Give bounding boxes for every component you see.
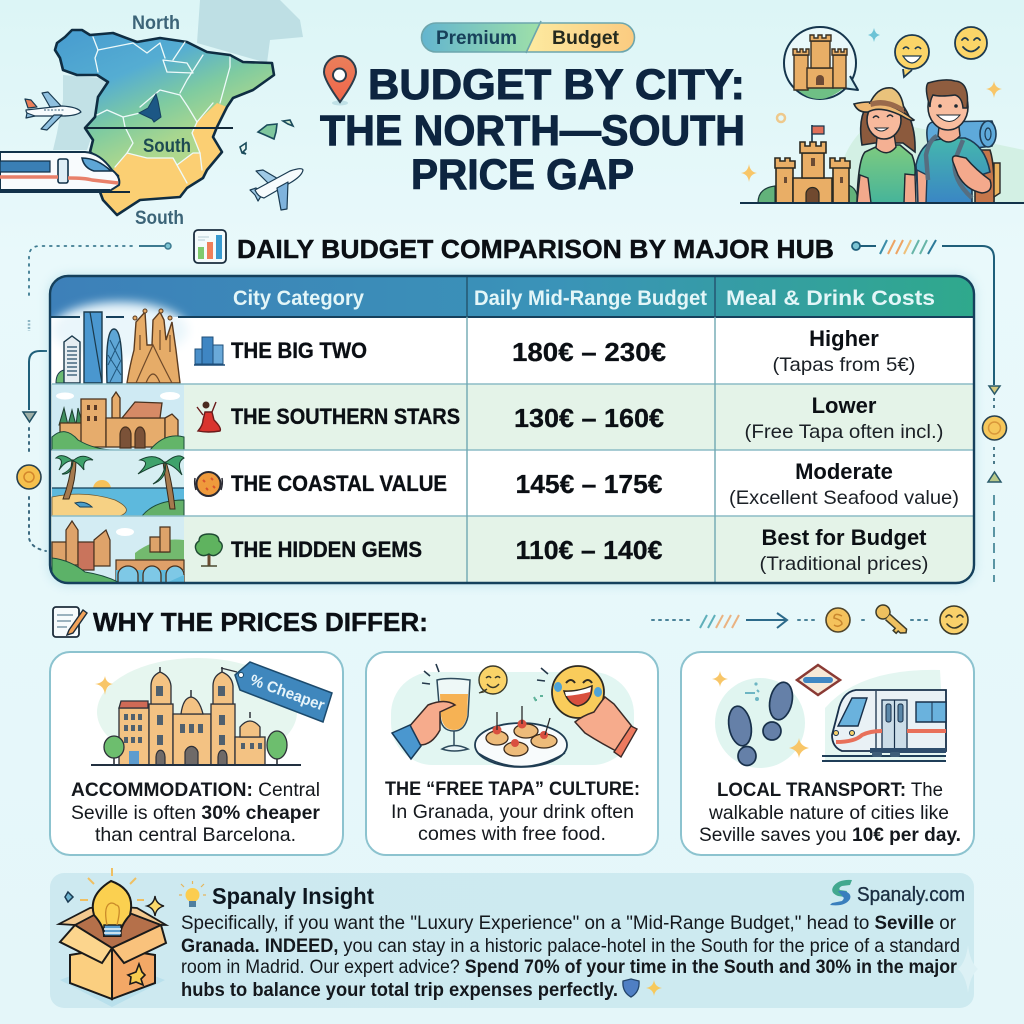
table header labels: Meal & Drink Costs xyxy=(726,286,935,310)
table image: southern palace xyxy=(52,384,184,450)
row: the southern stars xyxy=(231,393,944,443)
connector: top right line to table side xyxy=(852,240,1006,582)
illustration: travellers and castle xyxy=(740,27,1024,203)
icon: paella pan xyxy=(195,472,222,496)
decorative journey strip: arrow, coin, key, smile xyxy=(652,602,968,638)
connector: left side arrow and coin xyxy=(17,351,47,551)
map of Spain with north-south gradient: North xyxy=(132,13,180,34)
row: the big two xyxy=(231,326,916,376)
card text: comes with free food. xyxy=(418,823,606,845)
table image: big cities skyline xyxy=(52,302,188,383)
insight body text: Granada. INDEED, you can stay in a historic palace-hotel in the South for the price of a standard xyxy=(181,936,960,957)
icon: location pin xyxy=(324,56,356,106)
row: the big two: THE BIG TWO xyxy=(231,338,367,363)
card text: In Granada, your drink often xyxy=(391,801,634,823)
icon: tree xyxy=(195,534,222,566)
card text xyxy=(385,778,640,845)
row: the southern stars: 130€ – 160€ xyxy=(514,403,664,433)
category toggle pill: premium and budget xyxy=(422,21,634,53)
row: the coastal value: Moderate xyxy=(795,459,893,484)
map of Spain with north-south gradient: South xyxy=(143,136,191,157)
row: the coastal value: 145€ – 175€ xyxy=(516,469,662,499)
card text: Seville saves you 10€ per day. xyxy=(699,824,961,846)
card text: ACCOMMODATION: Central xyxy=(71,779,320,801)
card text xyxy=(71,779,320,846)
insight heading: Spanaly Insight xyxy=(212,883,374,909)
title: THE NORTH—SOUTH xyxy=(320,107,745,155)
illustration: footsteps, metro sign, train xyxy=(712,665,946,768)
card text: than central Barcelona. xyxy=(95,824,296,846)
insight body text: Specifically, if you want the "Luxury Experience" on a "Mid-Range Budget," head to Seville or xyxy=(181,913,957,934)
row: the big two: 180€ – 230€ xyxy=(512,337,666,367)
panel: spanaly insight xyxy=(50,868,978,1008)
table image: hidden gems town and bridge xyxy=(52,516,184,583)
insight body text: hubs to balance your total trip expenses perfectly. xyxy=(181,980,618,1001)
card text: walkable nature of cities like xyxy=(708,802,949,824)
icon: flamenco dancer xyxy=(197,402,220,432)
row: the hidden gems: (Traditional prices) xyxy=(760,553,928,575)
row: the coastal value: THE COASTAL VALUE xyxy=(231,471,447,496)
row: the big two: (Tapas from 5€) xyxy=(772,354,916,376)
connector: top left dotted path xyxy=(29,243,171,331)
icon: blue plane xyxy=(250,169,303,210)
illustration: drink, tapas and emoji xyxy=(391,664,637,767)
icon: high speed train xyxy=(0,152,119,193)
icon: shield and sparkles xyxy=(623,979,662,997)
card text xyxy=(699,779,961,846)
card text: LOCAL TRANSPORT: The xyxy=(717,779,943,801)
row: the hidden gems: THE HIDDEN GEMS xyxy=(231,537,422,562)
section heading: daily budget comparison: DAILY BUDGET COMPARISON BY MAJOR HUB xyxy=(237,234,834,264)
row: the southern stars: Lower xyxy=(812,393,877,418)
map of Spain with north-south gradient xyxy=(53,0,303,229)
row: the hidden gems: 110€ – 140€ xyxy=(516,535,662,565)
icon: red-tail plane xyxy=(25,92,81,130)
table header labels: City Category xyxy=(233,286,364,310)
title: BUDGET BY CITY: xyxy=(368,61,745,109)
row: the coastal value xyxy=(231,459,959,509)
spanaly logo xyxy=(830,880,965,906)
comparison table xyxy=(48,274,976,586)
row: the hidden gems xyxy=(231,525,928,575)
card: accommodation xyxy=(50,652,343,855)
icon: office buildings xyxy=(194,337,225,365)
table header labels xyxy=(233,286,935,310)
row: the southern stars: THE SOUTHERN STARS xyxy=(231,404,460,429)
card text: Seville is often 30% cheaper xyxy=(71,802,320,824)
title: PRICE GAP xyxy=(411,151,634,199)
card text: THE “FREE TAPA” CULTURE: xyxy=(385,778,640,800)
table header labels: Daily Mid-Range Budget xyxy=(474,286,707,310)
insight body text xyxy=(181,913,960,1001)
icon: small bulb xyxy=(179,881,206,907)
row: the southern stars: (Free Tapa often incl.) xyxy=(744,421,944,443)
card: free tapa culture xyxy=(366,652,658,855)
illustration: seville cathedral with price tag: % Cheaper xyxy=(248,672,327,714)
category toggle pill: premium and budget: Premium xyxy=(436,28,517,49)
card: local transport xyxy=(681,652,974,855)
map of Spain with north-south gradient: South xyxy=(135,208,184,229)
category toggle pill: premium and budget: Budget xyxy=(552,28,620,49)
row: the coastal value: (Excellent Seafood value) xyxy=(729,487,959,509)
title xyxy=(320,61,745,199)
insight body text: room in Madrid. Our expert advice? Spend 70% of your time in the South and 30% in the major xyxy=(181,957,958,978)
illustration: seville cathedral with price tag xyxy=(91,658,332,766)
section heading: why the prices differ: WHY THE PRICES DIFFER: xyxy=(93,607,428,637)
spanaly logo: Spanaly.com xyxy=(857,883,965,906)
row: the big two: Higher xyxy=(809,326,879,351)
icon: open box with light bulb xyxy=(59,868,166,1007)
row: the hidden gems: Best for Budget xyxy=(762,525,927,550)
table image: coastal beach xyxy=(52,450,184,516)
